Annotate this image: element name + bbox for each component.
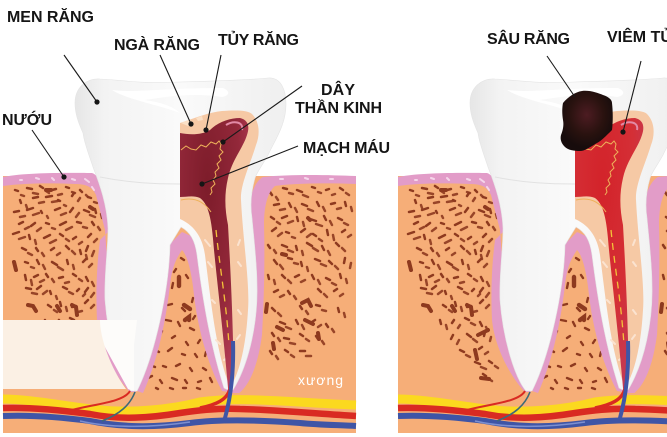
icon: black decay cavity	[561, 91, 613, 151]
label: nuou	[2, 110, 67, 180]
cream patch	[3, 320, 126, 389]
white erased patch	[90, 320, 137, 391]
label: sau rang: SÂU RĂNG	[487, 29, 570, 48]
panel: decayed tooth	[398, 78, 667, 433]
label: mach mau: MẠCH MÁU	[303, 138, 390, 157]
label: nga rang: NGÀ RĂNG	[114, 35, 200, 54]
label: day than kinh: DÂY	[321, 80, 355, 99]
panel: healthy tooth	[3, 78, 356, 433]
label: nga rang	[114, 35, 200, 127]
label: men rang: MEN RĂNG	[7, 7, 94, 26]
label: sau rang	[487, 29, 575, 97]
pulp nerves	[181, 141, 223, 212]
label: day than kinh: THẦN KINH	[295, 98, 382, 117]
blood vessels	[3, 341, 356, 433]
pulp nerves inflamed	[576, 141, 618, 212]
label: viem tuy	[607, 27, 667, 135]
bone label: xương	[298, 372, 343, 388]
blood vessels inflamed	[398, 341, 667, 433]
label: nuou: NƯỚU	[2, 110, 52, 129]
label: mach mau	[199, 138, 390, 187]
label: men rang	[7, 7, 100, 105]
label: tuy rang	[203, 30, 299, 133]
label: day than kinh	[220, 80, 382, 145]
label: tuy rang: TỦY RĂNG	[218, 30, 299, 49]
